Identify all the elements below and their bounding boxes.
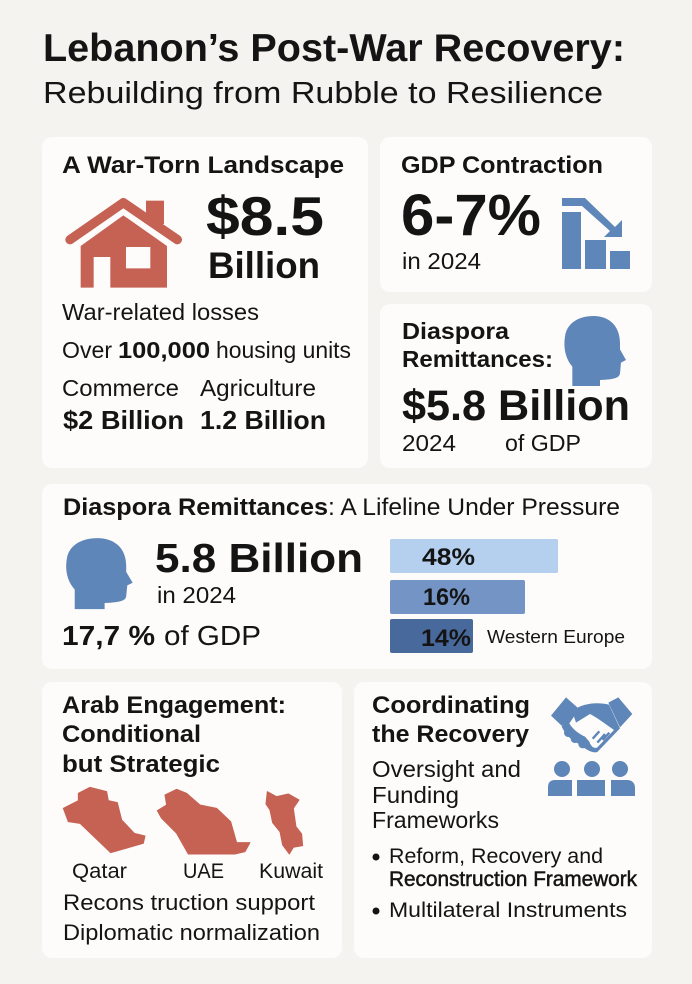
heading [63,494,620,521]
bar: 16% [390,580,525,614]
bar chart [390,539,625,653]
label: kuwait: Kuwait [259,860,323,883]
bar: 14% [390,619,473,653]
title [43,27,625,110]
stat: share of gdp: 17,7 % [62,620,155,651]
stat: 5.8 billion: $5.8 Billion [402,382,630,430]
heading: A War-Torn Landscape [62,152,344,179]
text: housing units: Over [62,337,112,363]
bar: 48%: 48% [422,544,475,571]
text: of gdp: of GDP [505,430,581,456]
stat: agriculture: 1.2 Billion [200,405,326,435]
heading: : A Lifeline Under Pressure [328,494,620,521]
text: housing units: housing units [216,337,351,363]
panel: a war-torn landscape [42,137,368,468]
text: oversight and funding frameworks: Oversight and [372,756,521,782]
heading: Remittances: [402,346,553,372]
panel: arab engagement [42,682,342,958]
text: diplomatic normalization: Diplomatic normalization [63,920,320,945]
map: uae [157,789,250,854]
bullet: reform framework [372,845,637,891]
bullet: multilateral instruments: Multilateral Instruments [389,899,627,922]
panel: coordinating the recovery [354,682,652,958]
stat: agriculture [200,375,326,435]
panel: a lifeline under pressure [42,484,652,669]
bar: 16%: 16% [423,584,470,611]
stat: agriculture: Agriculture [200,375,316,401]
stat: 8.5 billion: $8.5 [206,185,324,247]
heading [372,692,530,748]
stat: 5.8 billion: 5.8 Billion [155,535,363,581]
bullet: reform framework: Reform, Recovery and [389,845,603,868]
icon: head [66,538,133,609]
icon: house [70,201,177,288]
stat: 8.5 billion [206,185,324,286]
stat: commerce: $2 Billion [63,405,184,435]
text: in 2024: in 2024 [157,582,236,608]
title: Lebanon’s Post-War Recovery: [43,27,625,70]
subtitle: Rebuilding from Rubble to Resilience [43,75,603,110]
stat: share of gdp [62,620,261,651]
text: oversight and funding frameworks: Funding [372,782,459,808]
heading: but Strategic [62,751,220,778]
text: housing units: 100,000 [118,337,210,363]
stat: commerce [62,375,184,435]
label: western europe: Western Europe [487,627,625,647]
heading: Arab Engagement: [62,692,286,719]
icon: handshake [551,697,632,752]
text: 2024: 2024 [402,430,456,456]
bar: 48% [390,539,558,573]
bullet: reform framework: Reconstruction Framework [389,868,637,891]
label: uae: UAE [183,860,224,883]
text: oversight and funding frameworks: Frameworks [372,807,499,833]
map: kuwait [266,792,303,854]
heading: Conditional [62,721,201,748]
heading: Coordinating [372,692,530,719]
heading: the Recovery [372,721,530,748]
stat: commerce: Commerce [62,375,179,401]
stat: share of gdp: of GDP [164,620,261,651]
text: in 2024: in 2024 [402,248,481,274]
heading [62,692,286,778]
icon: head [564,316,626,386]
text: reconstruction support: Recons truction support [63,890,315,915]
icon: falling bar chart [562,198,630,269]
icon: three people [548,761,635,796]
stat: 6-7%: 6-7% [401,183,541,248]
panel: diaspora remittances stat [380,304,652,468]
text: oversight and funding frameworks [372,756,521,833]
text: war-related losses: War-related losses [62,299,259,325]
text: housing units [62,337,351,363]
heading [402,318,553,372]
bar: 14%: 14% [421,625,471,652]
heading: GDP Contraction [401,152,603,179]
stat: 8.5 billion: Billion [208,245,320,286]
label: qatar: Qatar [72,860,127,883]
heading: Diaspora Remittances [63,494,328,521]
heading: Diaspora [402,318,509,344]
panel: gdp contraction [380,137,652,292]
map: qatar [63,787,145,853]
